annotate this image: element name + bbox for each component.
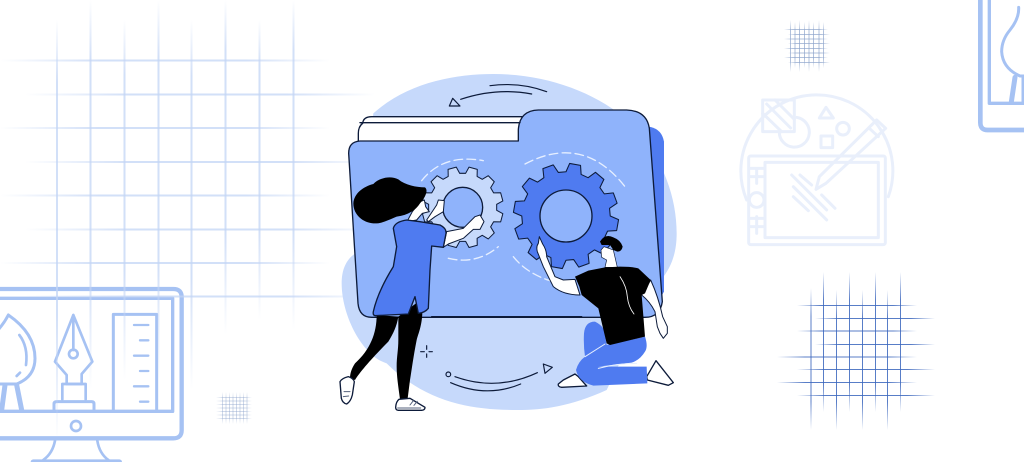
top cycle arrow: [449, 85, 547, 106]
woman face and neck: [407, 200, 429, 222]
man hair: [600, 236, 623, 252]
woman: [340, 177, 484, 410]
small grid: top right: [784, 20, 830, 72]
woman far arm: [427, 200, 444, 222]
man right shoe: [647, 361, 673, 385]
background grid: top left: [0, 0, 375, 440]
man face and neck: [601, 247, 617, 267]
woman left leg: [350, 315, 398, 380]
sparkle: [421, 346, 432, 357]
woman right shoe: [396, 398, 425, 410]
man back arm: [642, 280, 667, 338]
dashed arcs around gears: [422, 153, 625, 281]
woman near arm: [443, 215, 484, 247]
dark gear: [505, 155, 627, 277]
man trouser fold lines: [585, 344, 637, 368]
folder side strip: [648, 127, 664, 302]
woman shoe sole: [343, 392, 421, 408]
monitor icon: top right: [980, 0, 1024, 130]
woman right leg: [397, 302, 422, 399]
folder body: [349, 110, 662, 317]
woman left shoe: [340, 377, 354, 404]
folder tab line: [360, 121, 520, 125]
man: [537, 236, 673, 387]
man pointing arm: [537, 237, 580, 295]
light gear: [413, 158, 512, 257]
dark grid: bottom right: [777, 272, 935, 430]
man left shoe: [558, 374, 587, 387]
man shirt highlight: [620, 277, 634, 314]
man t-shirt: [575, 267, 651, 345]
man pants: [576, 322, 647, 386]
small grid: bottom left: [216, 392, 252, 424]
folder bottom line: [432, 315, 582, 319]
background blob: [342, 74, 677, 410]
woman tunic: [373, 220, 446, 316]
woman hair: [353, 177, 427, 223]
main illustration: folder, gears and two people: [340, 74, 677, 410]
monitor icon: bottom left: [0, 289, 182, 462]
folder back sheet: [358, 117, 530, 142]
bottom cycle arrow: [446, 364, 552, 391]
drawing tablet icon: [741, 95, 893, 245]
